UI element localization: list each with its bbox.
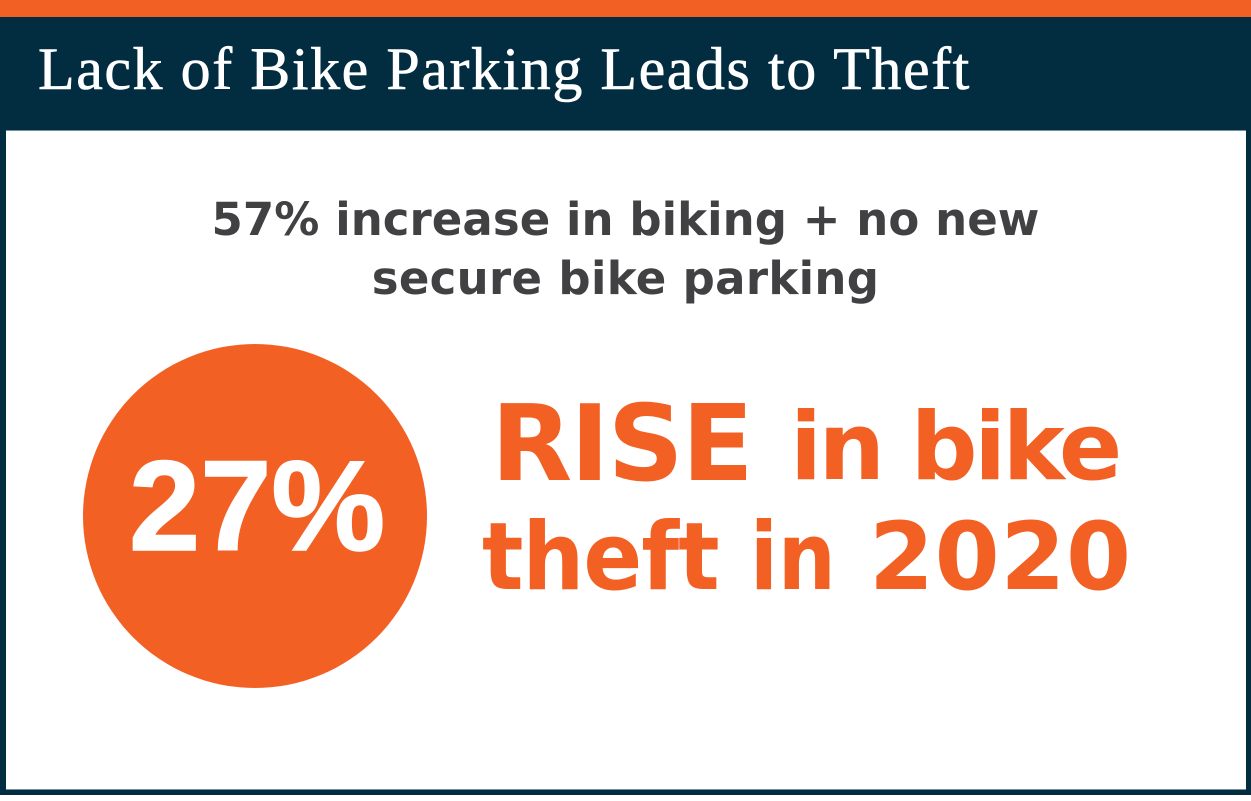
- title: Lack of Bike Parking Leads to Theft: [38, 36, 971, 102]
- subheading: [212, 193, 1039, 305]
- stat number: 27%: [129, 435, 385, 578]
- callout line 2: in: in: [750, 503, 836, 612]
- callout line 2: 2020: 2020: [869, 503, 1132, 612]
- circle stat: [83, 344, 427, 688]
- callout words: in bike: in bike: [790, 393, 1119, 502]
- top orange stripe: [0, 0, 1251, 17]
- subheading: secure bike parking: [372, 252, 879, 305]
- callout text: [482, 382, 1132, 612]
- callout word: RISE: RISE: [491, 382, 752, 505]
- subheading: 57% increase in biking + no new: [212, 193, 1039, 246]
- callout line 2: theft: theft: [482, 503, 719, 612]
